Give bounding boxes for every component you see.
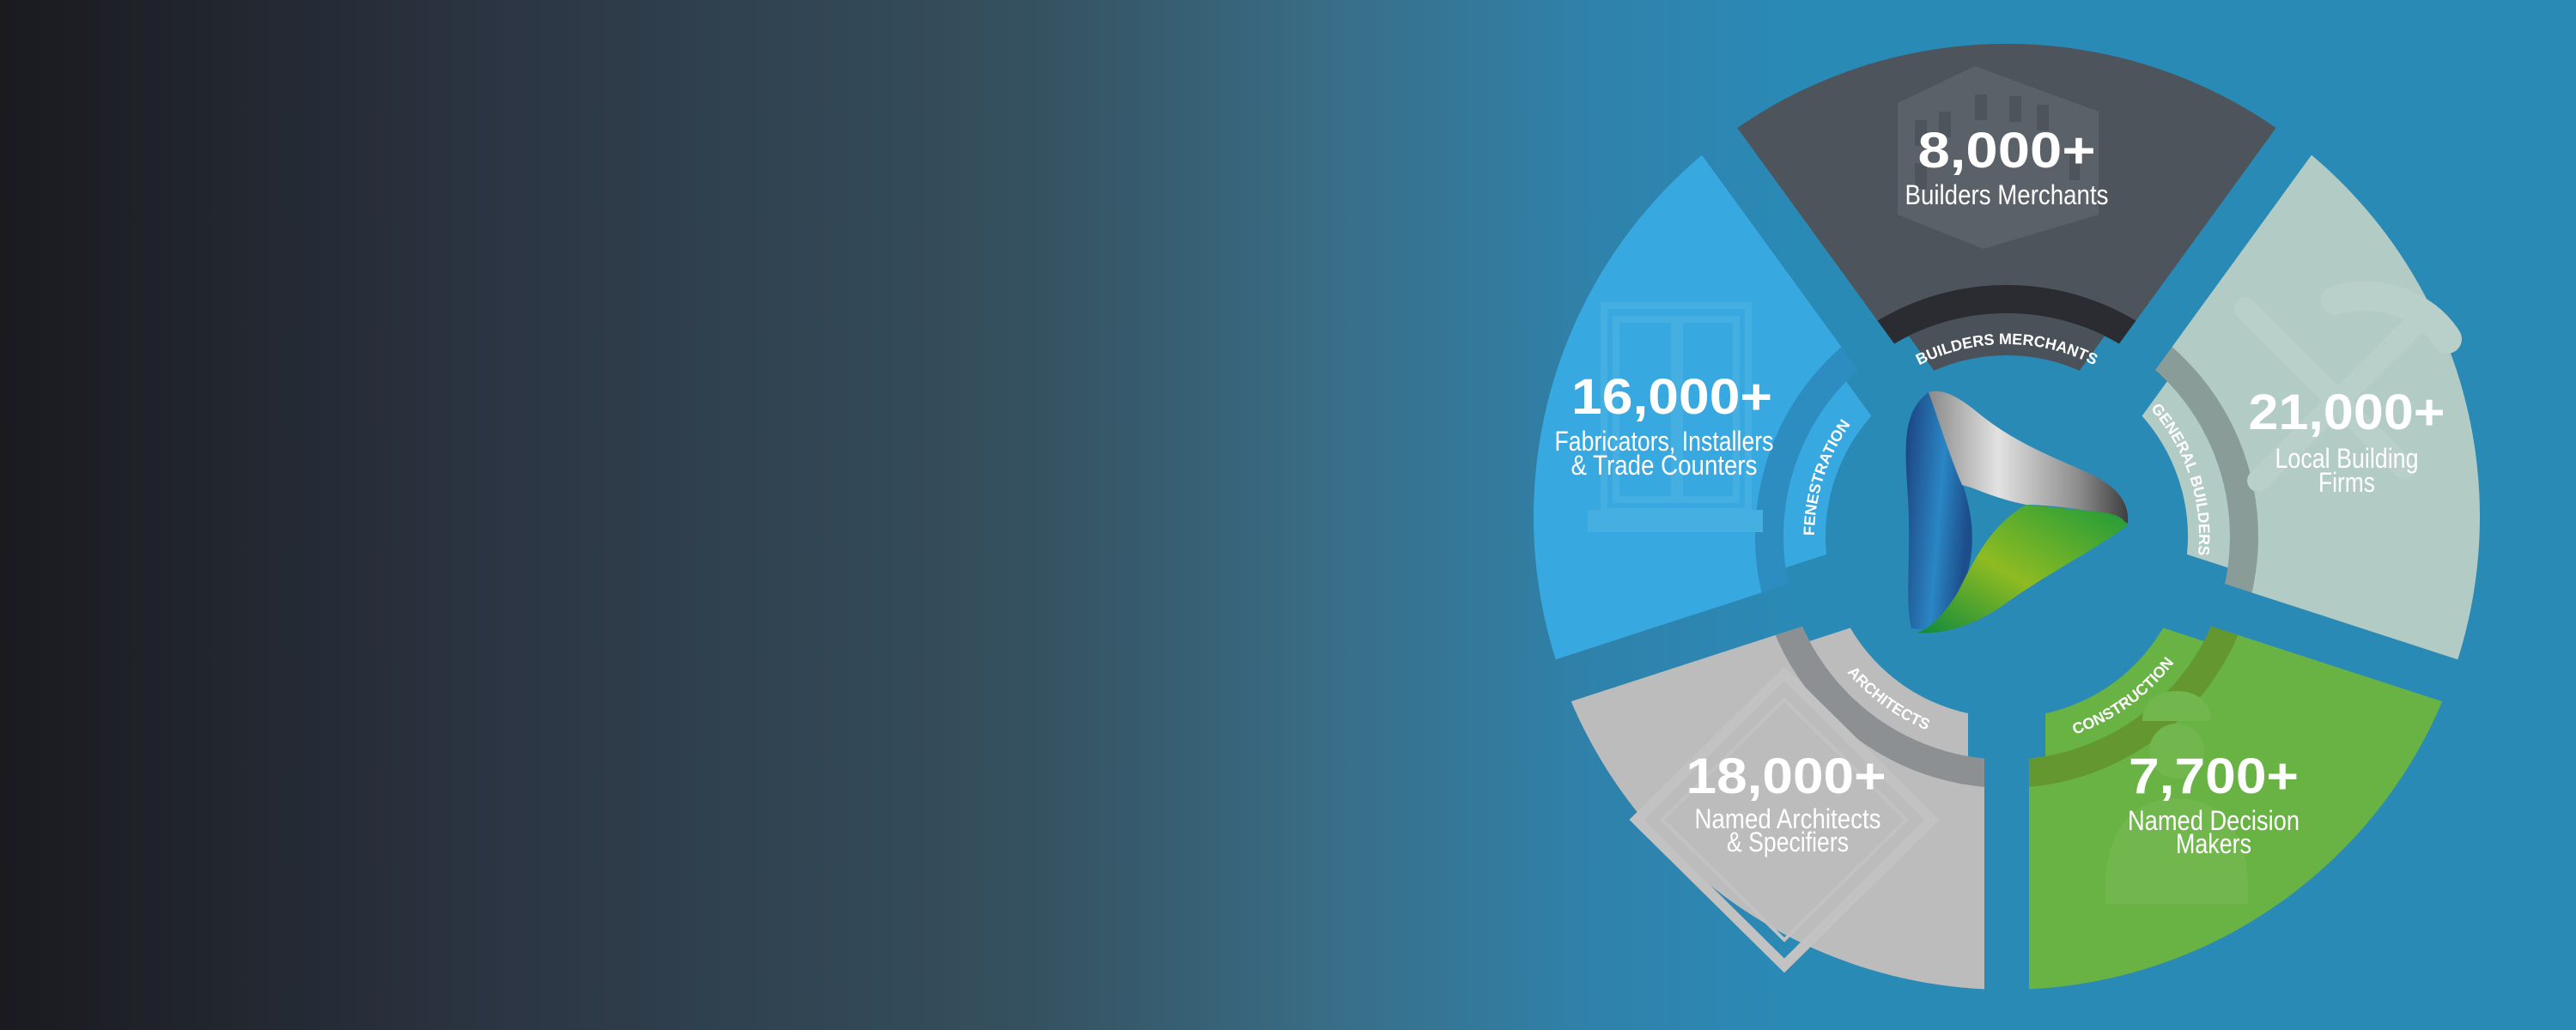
band label: builders merchants: BUILDERS MERCHANTS	[1915, 333, 2097, 365]
icon: window watermark	[1591, 306, 1759, 529]
band label: construction: CONSTRUCTION	[2073, 657, 2174, 733]
segment: builders merchants	[1737, 44, 2276, 371]
segment: construction	[2029, 627, 2442, 989]
stat: 16,000+: 16,000+	[1571, 369, 1772, 425]
stat: 8,000+: Builders Merchants	[1905, 179, 2109, 210]
stat: 8,000+: 8,000+	[1918, 123, 2095, 179]
stat: 16,000+: & Trade Counters	[1571, 450, 1757, 481]
stat: 21,000+: Firms	[2318, 467, 2375, 498]
stat: 18,000+: Named Architects	[1695, 803, 1880, 834]
stat: 7,700+: 7,700+	[2129, 748, 2299, 804]
stat: 8,000+	[1905, 123, 2109, 210]
stat: 16,000+	[1554, 369, 1774, 481]
icon: building watermark	[1898, 66, 2099, 249]
stat: 16,000+: Fabricators, Installers	[1554, 426, 1774, 457]
logo	[1906, 391, 2128, 633]
stat: 21,000+	[2248, 385, 2445, 498]
wheel	[1534, 44, 2480, 989]
band label: architects: ARCHITECTS	[1848, 668, 1929, 730]
segment: architects	[1571, 627, 1984, 989]
icon: diamond watermark	[1637, 674, 1932, 966]
band label: general builders: GENERAL BUILDERS	[2153, 403, 2210, 555]
stat: 18,000+: & Specifiers	[1727, 827, 1849, 857]
stat: 7,700+: Makers	[2176, 828, 2251, 859]
stat: 18,000+: 18,000+	[1686, 748, 1886, 804]
stat: 18,000+	[1686, 748, 1886, 857]
band label: fenestration: FENESTRATION	[1803, 419, 1850, 535]
stat: 7,700+	[2128, 748, 2300, 859]
icon: tools watermark	[2245, 296, 2447, 481]
segment: general builders	[2142, 154, 2480, 659]
segment: fenestration	[1534, 155, 1872, 659]
icon: person watermark	[2105, 691, 2248, 904]
stat: 21,000+: 21,000+	[2248, 385, 2445, 440]
stat: 7,700+: Named Decision	[2128, 805, 2300, 836]
stat: 21,000+: Local Building	[2275, 443, 2418, 474]
